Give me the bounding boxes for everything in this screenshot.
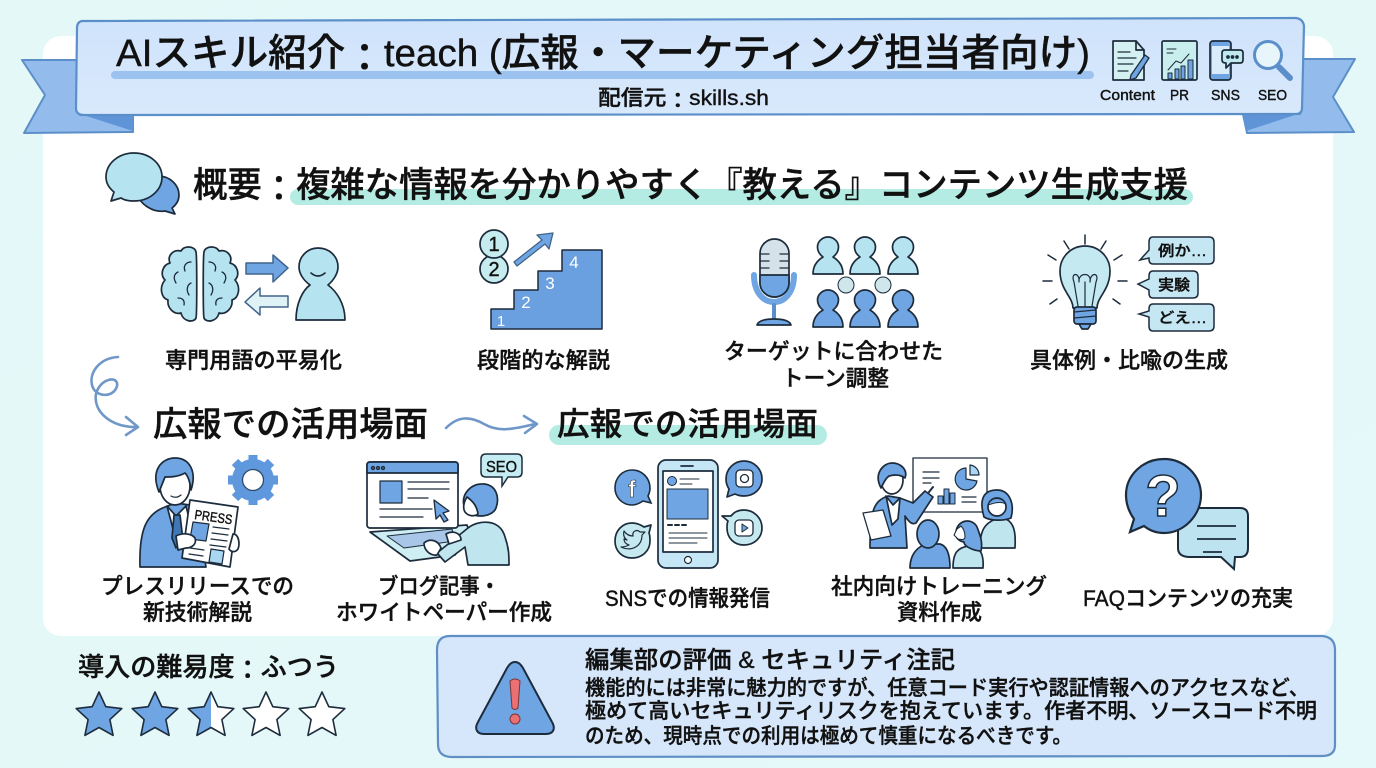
bubble text: どえ… [1158, 310, 1207, 327]
label line 1: ターゲットに合わせた [724, 339, 943, 364]
title underline [111, 71, 1094, 79]
icon: facebook bubble [615, 470, 651, 505]
title text: teach (広報・マーケティング担当者向け) [384, 33, 1090, 75]
label line 1: プレスリリースでの [101, 574, 294, 599]
icon: right arrow [246, 255, 288, 282]
difficulty label: ： [235, 655, 261, 685]
icon: press sheet [176, 500, 239, 567]
feature: step by step [477, 230, 610, 373]
icon: video bubble [722, 510, 762, 545]
source text: 配信元 [598, 87, 661, 110]
section heading: highlighted [549, 406, 827, 445]
label: PR: PR [1170, 88, 1189, 104]
right ribbon tail [1243, 59, 1355, 133]
icon: presentation board [913, 458, 987, 512]
icon: numbered circles [480, 230, 508, 283]
icon: microphone [754, 239, 794, 325]
icon: left arrow [245, 288, 288, 315]
number 2: 2 [488, 259, 500, 281]
icon: audience woman [953, 521, 983, 568]
icon: laptop [367, 462, 470, 561]
text bubble lines [1197, 526, 1236, 552]
label: SEO: SEO [1258, 88, 1287, 104]
stair number 1: 1 [497, 313, 505, 330]
feature: plain language [161, 247, 345, 373]
icon: gear [228, 455, 278, 505]
overview heading [106, 153, 1193, 214]
title text: AIスキル紹介 [116, 33, 342, 75]
difficulty label: ふつう [261, 652, 339, 682]
use case: social media [605, 460, 770, 611]
icon: PR chart [1162, 41, 1197, 80]
use case: blog and whitepaper [336, 454, 552, 625]
heading text: ： [262, 170, 296, 209]
left ribbon tail [22, 60, 133, 133]
icon: person [296, 248, 345, 320]
label: FAQコンテンツの充実 [1083, 586, 1293, 611]
heading highlight [549, 425, 827, 445]
icon: audience man [910, 520, 950, 568]
label: 専門用語の平易化 [165, 348, 342, 373]
star 2 [132, 692, 178, 735]
label line 1: ブログ記事・ [378, 574, 500, 599]
icon: instagram bubble [726, 461, 762, 497]
note line 1: 機能的には非常に魅力的ですが、任意コード実行や認証情報へのアクセスなど、 [585, 677, 1309, 700]
difficulty rating [76, 652, 345, 735]
label: 具体例・比喩の生成 [1030, 348, 1228, 373]
note heading: 編集部の評価 & セキュリティ注記 [585, 647, 955, 674]
facebook letter: f [628, 476, 636, 502]
bubble text: 例か… [1158, 243, 1207, 260]
banner body [76, 18, 1304, 115]
bubble text: SEO [486, 459, 517, 476]
bubble: SEO [481, 454, 522, 486]
left ribbon fold [77, 113, 133, 131]
use case: press release [101, 455, 294, 625]
stair number 2: 2 [521, 293, 531, 312]
star 5 [299, 692, 345, 735]
note line 3: のため、現時点での利用は極めて慎重になるべきです。 [585, 725, 1072, 748]
panel background [437, 636, 1335, 757]
icon: twitter bubble [615, 523, 651, 558]
icon: audience [813, 237, 918, 327]
star 1 [76, 692, 122, 735]
note line 2: 極めて高いセキュリティリスクを抱えています。作者不明、ソースコード不明 [585, 700, 1317, 723]
label line 2: ホワイトペーパー作成 [336, 600, 552, 625]
title text: ： [345, 38, 384, 80]
label line 2: 資料作成 [897, 600, 982, 625]
icon: woman colleague [980, 490, 1015, 548]
icon: light bulb [1043, 235, 1127, 329]
stair number 3: 3 [545, 274, 555, 293]
icon: businessman with newspaper [140, 458, 206, 567]
heading highlight [290, 189, 1193, 205]
label: SNSでの情報発信 [605, 586, 770, 611]
icon: text bubble [1178, 508, 1248, 569]
title banner [22, 18, 1355, 133]
heading text: 概要 [193, 166, 263, 205]
arrow: curl to section heading [92, 357, 138, 435]
bubble text: 実験 [1158, 277, 1190, 294]
use case: internal training [831, 458, 1047, 625]
main white panel [43, 36, 1333, 636]
feature: tone adjustment [724, 237, 943, 391]
icon: SNS phone [1210, 41, 1243, 80]
use case: FAQ [1083, 459, 1293, 611]
icon: rising arrow [514, 233, 553, 266]
feature: examples and metaphors [1030, 235, 1228, 373]
source text: ： [666, 90, 689, 113]
number 1: 1 [488, 234, 500, 256]
icon: speech bubbles [106, 153, 179, 214]
panel: editorial note and security warning [437, 636, 1335, 757]
icon: presenter [863, 463, 933, 548]
bubble: example [1140, 237, 1214, 264]
icon: SEO magnifier [1254, 42, 1290, 78]
label line 1: 社内向けトレーニング [831, 574, 1047, 599]
bubble: practice [1138, 271, 1198, 298]
stair number 4: 4 [569, 253, 579, 272]
label: SNS: SNS [1211, 88, 1240, 104]
press text: PRESS [194, 507, 233, 527]
heading text: 広報での活用場面 [557, 406, 818, 442]
icon: brain [161, 247, 239, 321]
icon: question bubble [1126, 459, 1201, 533]
star 3 half [188, 692, 234, 735]
right ribbon fold [1243, 114, 1298, 131]
difficulty label: 導入の難易度 [78, 652, 234, 682]
label line 2: 新技術解説 [143, 600, 252, 625]
question mark: ? [1145, 464, 1181, 529]
label line 2: トーン調整 [782, 366, 889, 391]
star 4 [243, 692, 289, 735]
icon: person typing [424, 484, 509, 565]
icon: warning triangle [476, 662, 554, 734]
heading text: 複雑な情報を分かりやすく『教える』コンテンツ生成支援 [296, 166, 1188, 205]
icon: staircase [491, 250, 602, 329]
bubble: analogy [1139, 304, 1214, 331]
label: Content: Content [1100, 88, 1155, 104]
source text: skills.sh [689, 87, 769, 110]
arrow: wavy connector [446, 416, 537, 433]
icon: content document [1113, 41, 1149, 80]
section heading: PR use cases: 広報での活用場面 [153, 406, 428, 444]
label: 段階的な解説 [477, 348, 610, 373]
icon: smartphone [658, 460, 718, 568]
